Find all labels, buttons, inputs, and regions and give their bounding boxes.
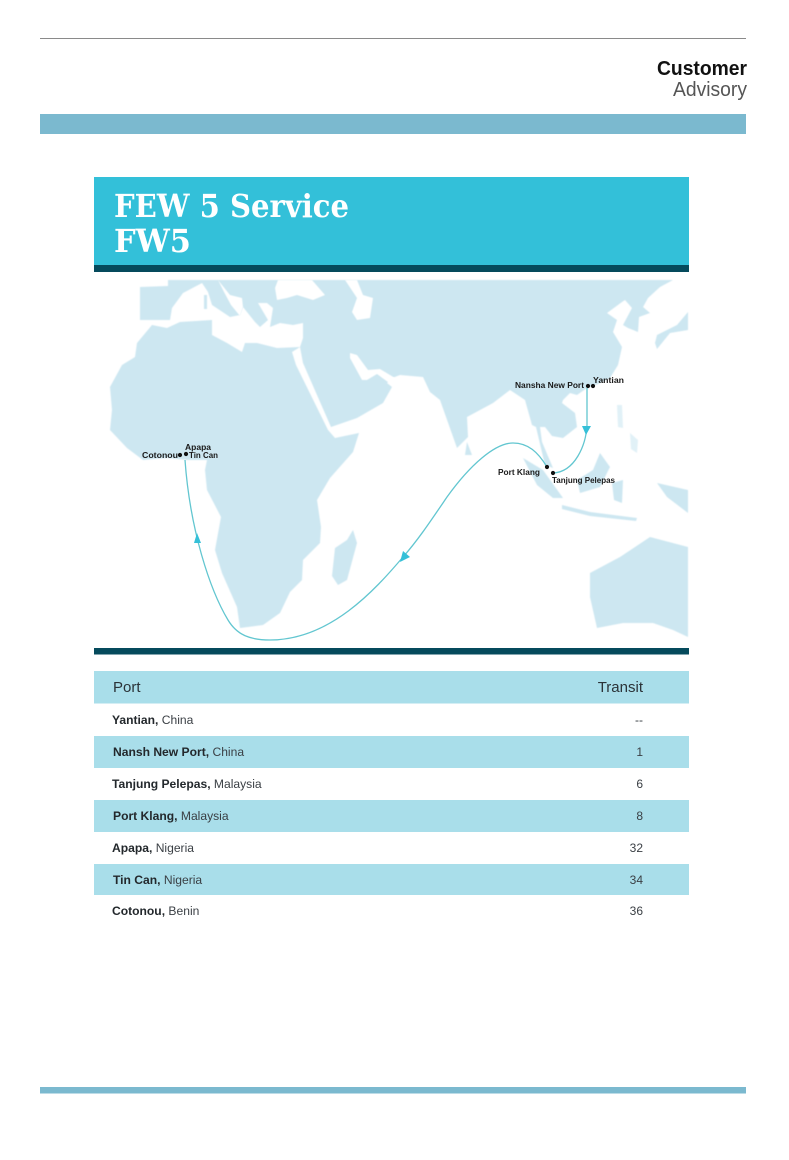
row: Nansh New Port — [94, 736, 689, 768]
header label: Customer Advisory: Customer — [657, 58, 747, 80]
title panel: FEW 5 Service FW5: FEW 5 Service — [114, 188, 349, 225]
row: Cotonou: 36 — [630, 904, 643, 918]
row: Yantian — [112, 713, 643, 727]
port labels: Tanjung Pelepas — [552, 476, 616, 485]
inland seas (white) — [218, 280, 395, 385]
row: Port Klang: 8 — [636, 809, 643, 823]
row: Apapa — [112, 841, 643, 855]
port dots — [178, 384, 595, 475]
row: Nansh New Port: 1 — [636, 745, 643, 759]
table header: Port — [113, 679, 141, 696]
title panel: FEW 5 Service FW5: FW5 — [114, 223, 191, 260]
map bottom rule — [94, 648, 689, 654]
footer band — [40, 1087, 746, 1094]
header label: Customer Advisory — [657, 58, 747, 101]
top colour band — [40, 114, 746, 134]
route arrows — [194, 426, 591, 562]
port labels: Nansha New Port — [515, 381, 584, 390]
row: Cotonou: Cotonou, Benin — [112, 904, 199, 918]
table header — [94, 671, 689, 704]
row: Cotonou — [112, 904, 643, 918]
row: Port Klang — [94, 800, 689, 832]
row: Yantian: Yantian, China — [112, 713, 194, 727]
row: Yantian: -- — [635, 713, 643, 727]
row: Apapa: Apapa, Nigeria — [112, 841, 194, 855]
row: Tin Can — [94, 864, 689, 895]
header label: Customer Advisory: Advisory — [673, 79, 747, 101]
row: Nansh New Port: Nansh New Port, China — [113, 745, 244, 759]
map land masses — [110, 280, 688, 637]
row: Tin Can: Tin Can, Nigeria — [113, 873, 202, 887]
port labels: Port Klang — [498, 468, 540, 477]
row: Tin Can: 34 — [630, 873, 643, 887]
transit table — [94, 671, 689, 918]
row: Tanjung Pelepas: 6 — [636, 777, 643, 791]
port labels: Tin Can — [189, 451, 218, 460]
row: Port Klang: Port Klang, Malaysia — [113, 809, 229, 823]
port labels: Apapa — [185, 443, 212, 452]
title panel: FEW 5 Service FW5 — [94, 177, 689, 272]
row: Tanjung Pelepas — [112, 777, 643, 791]
shipping route line — [185, 388, 587, 640]
port labels: Cotonou — [142, 451, 178, 460]
row: Apapa: 32 — [630, 841, 643, 855]
route map — [110, 280, 688, 640]
port labels: Yantian — [593, 376, 624, 385]
row: Tanjung Pelepas: Tanjung Pelepas, Malaysia — [112, 777, 262, 791]
table header: Transit — [598, 679, 644, 696]
port labels — [142, 376, 624, 485]
